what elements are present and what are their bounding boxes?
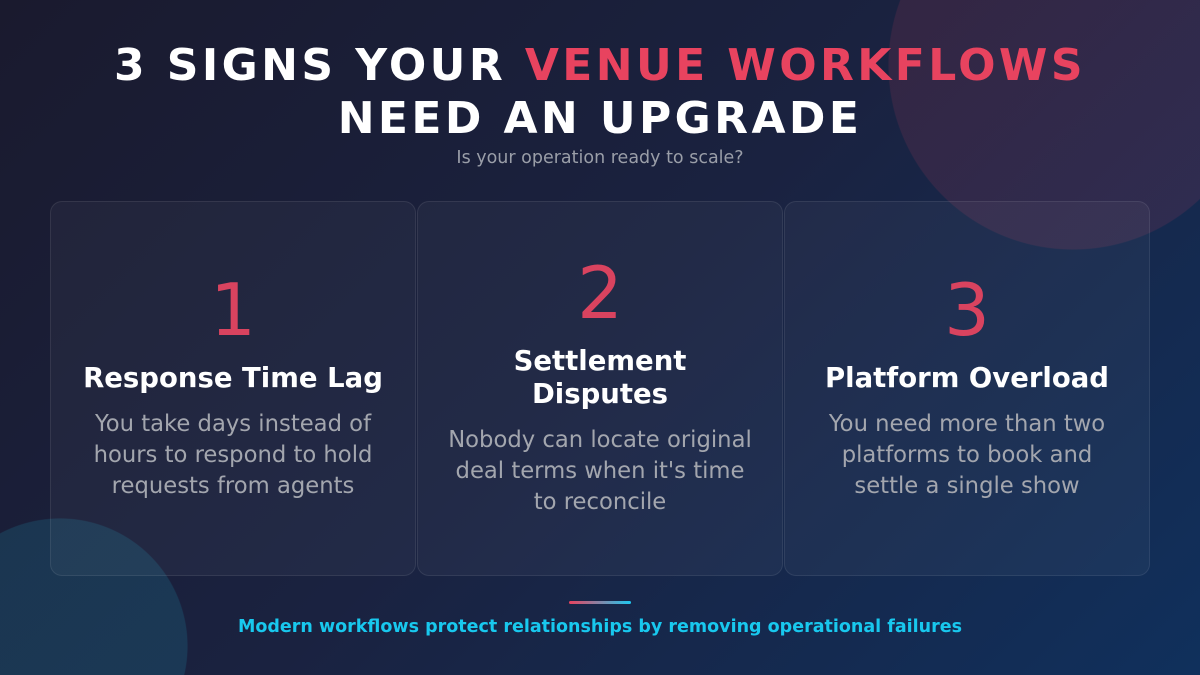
text 2: Nobody can locate original deal terms when it's time to reconcile: [448, 427, 752, 515]
number 2: 2: [577, 251, 623, 335]
text 1: You take days instead of hours to respond to hold requests from agents: [94, 410, 372, 498]
number 3: 3: [944, 268, 990, 352]
number 1: 1: [210, 268, 256, 352]
panel: card 2: [417, 201, 783, 576]
heading 2: Settlement: [514, 345, 686, 377]
heading 3: Platform Overload: [825, 362, 1109, 394]
panel: card 3: [784, 201, 1150, 576]
text 3: You need more than two platforms to book and settle a single show: [829, 410, 1105, 498]
title: [114, 40, 1086, 144]
heading 2: [514, 345, 686, 410]
heading 2: Disputes: [532, 378, 668, 410]
title: NEED AN UPGRADE: [338, 93, 862, 144]
subtitle: Is your operation ready to scale?: [456, 148, 744, 168]
panel: card 1: [50, 201, 416, 576]
footer tagline: Modern workflows protect relationships by removing operational failures: [238, 617, 962, 637]
heading 1: Response Time Lag: [83, 362, 383, 394]
accent divider: [569, 601, 631, 604]
title: 3 SIGNS YOUR VENUE WORKFLOWS: [114, 40, 1086, 91]
